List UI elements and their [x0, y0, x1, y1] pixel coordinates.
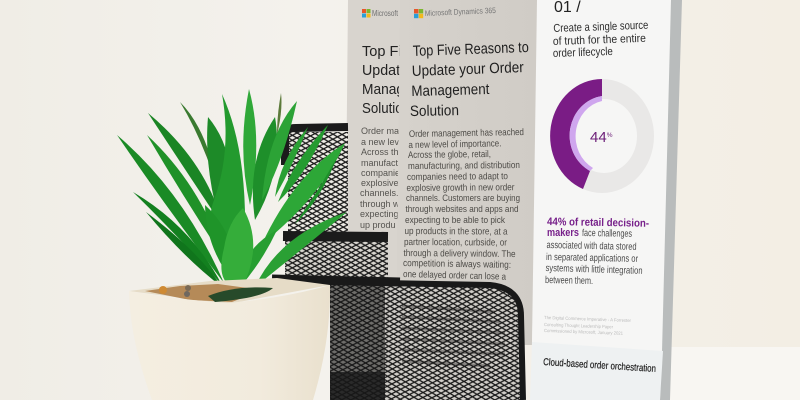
stat description: in separated applications or	[546, 252, 639, 265]
body text: Across the globe, retail,	[408, 149, 491, 161]
back page title: Solution	[362, 100, 410, 117]
body text: one delayed order can lose a	[403, 269, 507, 283]
panel: white stat page	[532, 0, 671, 352]
back page body text: explosive	[361, 178, 399, 188]
stat heading: of truth for the entire	[553, 33, 646, 48]
plant	[117, 89, 347, 288]
panel: white stat page side edge	[660, 0, 682, 400]
back page body text: channels.	[360, 188, 399, 198]
stat description: systems with little integration	[545, 263, 643, 277]
body text: expecting to be able to pick	[405, 215, 505, 226]
back page title: Update	[362, 62, 408, 79]
body text: explosive growth in new order	[406, 182, 515, 194]
table surface	[670, 347, 800, 400]
source note	[544, 315, 632, 336]
body text: partner location, curbside, or	[404, 237, 507, 249]
stat description: associated with data stored	[546, 240, 637, 253]
central leaves	[205, 205, 277, 288]
back page body text: companies	[361, 168, 405, 178]
front mesh tray	[272, 279, 525, 400]
stat heading	[553, 20, 649, 60]
title	[410, 39, 529, 120]
stat description	[545, 216, 649, 287]
back page body text: expecting	[360, 209, 399, 219]
source note: Commissioned by Microsoft, January 2021	[544, 328, 624, 336]
back mesh tray	[283, 127, 388, 280]
back page body text: Across the	[361, 147, 404, 157]
body text: through websites and apps and	[406, 204, 518, 215]
back page body text: a new level	[361, 137, 406, 147]
back page body text: through w	[360, 199, 400, 209]
pot interior	[129, 278, 330, 304]
pot body	[129, 285, 330, 400]
donut light arc	[570, 96, 602, 171]
back page body text: up produ	[360, 220, 396, 230]
panel: bottom label strip	[530, 342, 663, 400]
body text: companies need to adapt to	[407, 171, 508, 183]
back page body text: manufactu	[361, 158, 403, 168]
stat heading: order lifecycle	[553, 46, 613, 60]
icon: Microsoft logo, back page	[362, 9, 370, 18]
body text: channels. Customers are buying	[406, 193, 520, 204]
back page body text	[360, 126, 406, 230]
body text: up products in the store, at a	[404, 226, 508, 238]
bottom label text: Cloud-based order orchestration	[543, 357, 656, 375]
lower shelf of back tray	[283, 236, 388, 280]
donut value: 44	[590, 129, 607, 146]
body text: Order management has reached	[409, 127, 524, 140]
soil and pebbles	[145, 284, 273, 302]
body text: competition is always waiting:	[403, 258, 511, 271]
back page title	[362, 43, 417, 117]
stat heading: Create a single source	[553, 20, 649, 35]
donut value: %	[607, 132, 613, 139]
thin back leaves	[117, 93, 282, 287]
plant pot	[129, 278, 330, 400]
title: Top Five Reasons to	[413, 39, 529, 60]
title: Update your Order	[412, 59, 524, 80]
upper leaves	[207, 89, 347, 287]
panel: back brochure page	[345, 0, 417, 300]
donut chart: 44%	[550, 79, 654, 193]
source note: Consulting Thought Leadership Paper	[544, 322, 614, 329]
body text: manufacturing, and distribution	[408, 160, 520, 172]
back page title: Manag	[362, 81, 404, 98]
source note: The Digital Commerce Imperative - A Forrester	[544, 315, 632, 323]
front page logo text: Microsoft Dynamics 365	[425, 6, 496, 18]
back page logo text: Microsoft	[372, 9, 399, 18]
stat description: between them.	[545, 275, 593, 287]
stat description: face challenges	[582, 228, 632, 240]
icon: Microsoft logo, front page	[414, 9, 423, 18]
body text	[403, 127, 524, 283]
title: Management	[411, 81, 490, 100]
body text: a new level of importance.	[408, 138, 502, 151]
back page title: Top Five	[362, 43, 417, 60]
panel: front brochure page	[396, 0, 540, 345]
back page body text: Order man	[361, 126, 404, 136]
donut purple arc	[550, 79, 602, 189]
body text: through a delivery window. The	[403, 248, 516, 260]
stat description: 44% of retail decision-	[547, 216, 649, 230]
title: Solution	[410, 102, 459, 120]
stat description: makers	[547, 227, 579, 239]
